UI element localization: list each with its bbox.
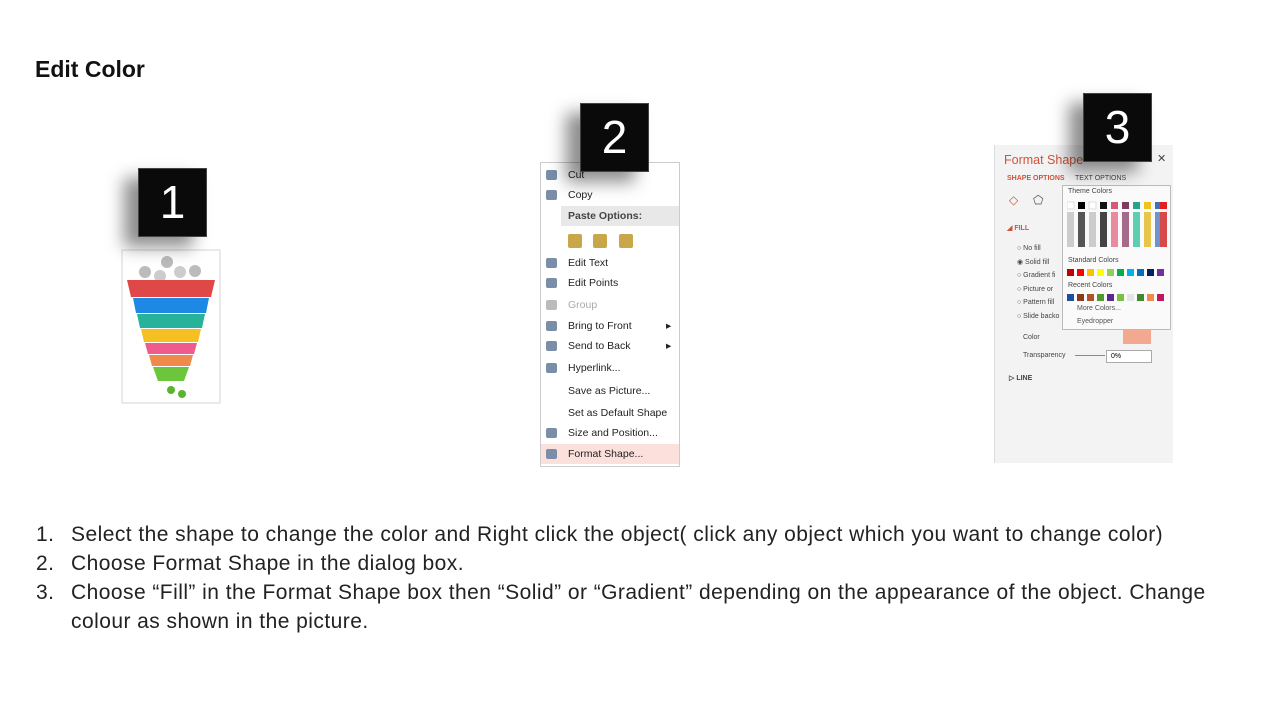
format shape pane: ✕ bbox=[1157, 153, 1166, 165]
format shape pane: ◢ FILL bbox=[1007, 225, 1029, 232]
context menu panel: ▸ bbox=[666, 320, 671, 332]
format shape pane: Transparency bbox=[1023, 352, 1066, 359]
color dropdown: Eyedropper bbox=[1077, 318, 1113, 325]
instructions list bbox=[36, 523, 1206, 633]
funnel graphic bbox=[122, 250, 220, 404]
context menu panel bbox=[540, 162, 680, 467]
step 2: context menu bbox=[540, 101, 680, 467]
number 2 bbox=[580, 103, 649, 172]
format shape pane: ○ No fill bbox=[1017, 245, 1041, 252]
instructions list: 2. bbox=[36, 552, 54, 575]
step 1: funnel with number bbox=[112, 166, 220, 404]
number 1 bbox=[138, 168, 207, 237]
format shape pane: ◇ bbox=[1009, 193, 1018, 207]
format shape pane bbox=[994, 145, 1173, 463]
color dropdown: Standard Colors bbox=[1068, 257, 1119, 264]
context menu panel: Copy bbox=[568, 189, 593, 201]
color dropdown: More Colors... bbox=[1077, 305, 1121, 312]
format shape pane: 0% bbox=[1111, 353, 1121, 360]
instructions list: 3. bbox=[36, 581, 54, 604]
context menu panel: Hyperlink... bbox=[568, 362, 621, 374]
format shape pane: ○ Pattern fill bbox=[1017, 299, 1054, 306]
context menu panel: Bring to Front bbox=[568, 320, 632, 332]
instructions list: 1. bbox=[36, 523, 54, 546]
format shape pane: Color bbox=[1023, 334, 1040, 341]
context menu panel: Send to Back bbox=[568, 340, 630, 352]
format shape pane: ○ Slide backo bbox=[1017, 312, 1059, 320]
context menu panel: Save as Picture... bbox=[568, 385, 650, 397]
number 1: 1 bbox=[160, 176, 185, 228]
color dropdown bbox=[1062, 185, 1171, 330]
title: Edit Color bbox=[35, 56, 145, 82]
context menu panel: Paste Options: bbox=[568, 210, 642, 222]
step 3: format shape pane bbox=[994, 91, 1173, 463]
format shape pane: Format Shape bbox=[1004, 153, 1083, 167]
instructions list: colour as shown in the picture. bbox=[71, 610, 369, 633]
number 3 bbox=[1083, 93, 1152, 162]
context menu panel: Format Shape... bbox=[568, 448, 643, 460]
instructions list: Choose “Fill” in the Format Shape box then “Solid” or “Gradient” depending on the appearance of the object. Change bbox=[71, 581, 1206, 604]
format shape pane: ○ Picture or bbox=[1017, 286, 1053, 292]
context menu panel: ▸ bbox=[666, 340, 671, 352]
number 2: 2 bbox=[602, 111, 627, 163]
color dropdown: Recent Colors bbox=[1068, 282, 1112, 289]
format shape pane: ◉ Solid fill bbox=[1017, 258, 1049, 266]
instructions list: Select the shape to change the color and Right click the object( click any object which you want to change color) bbox=[71, 523, 1163, 546]
context menu panel: Edit Text bbox=[568, 257, 608, 269]
context menu panel: Cut bbox=[568, 169, 584, 181]
format shape pane: TEXT OPTIONS bbox=[1075, 175, 1126, 182]
format shape pane: ○ Gradient fi bbox=[1017, 272, 1055, 279]
context menu panel: Set as Default Shape bbox=[568, 407, 667, 419]
format shape pane: ▷ LINE bbox=[1009, 375, 1032, 382]
context menu panel: Group bbox=[568, 299, 597, 311]
format shape pane: ⬠ bbox=[1033, 193, 1043, 207]
context menu panel: Size and Position... bbox=[568, 427, 658, 439]
number 3: 3 bbox=[1105, 101, 1130, 153]
format shape pane: SHAPE OPTIONS bbox=[1007, 175, 1065, 182]
context menu panel: Edit Points bbox=[568, 277, 618, 289]
color dropdown: Theme Colors bbox=[1068, 188, 1112, 195]
instructions list: Choose Format Shape in the dialog box. bbox=[71, 552, 464, 575]
